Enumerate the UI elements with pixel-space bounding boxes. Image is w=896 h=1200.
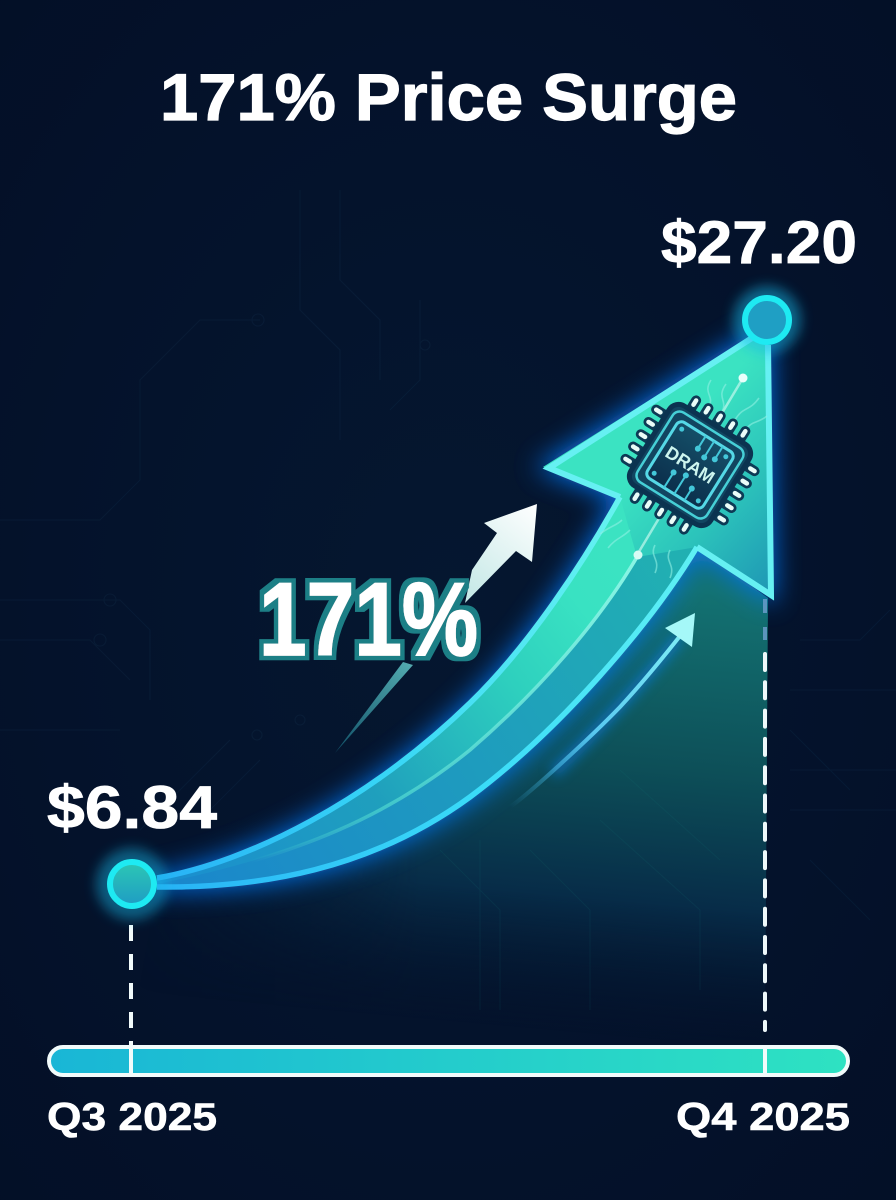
shaded area under the arrow	[276, 551, 768, 980]
arrow glow	[157, 337, 771, 887]
arrow lower outline	[157, 547, 697, 887]
white growth arrow	[335, 504, 537, 753]
centre line	[160, 557, 637, 884]
small cyan arrow	[510, 613, 695, 807]
circuit line with nodes	[637, 378, 743, 555]
node: Q3 start	[96, 848, 168, 920]
icon: DRAM chip	[610, 385, 770, 545]
value label: $27.20: $27.20	[661, 209, 857, 276]
timeline bar	[49, 1046, 848, 1076]
arrow head fill	[543, 337, 771, 598]
node: Q4 end	[733, 286, 801, 354]
arrow head outline	[549, 338, 771, 595]
axis label: Q3 2025: Q3 2025	[47, 1096, 217, 1139]
chip label: DRAM	[662, 442, 718, 488]
main rising arrow	[157, 337, 771, 887]
value label: $6.84: $6.84	[47, 774, 218, 841]
axis label: Q4 2025: Q4 2025	[676, 1096, 850, 1139]
arrow body upper band	[157, 497, 697, 887]
title: 171% Price Surge	[160, 60, 737, 134]
chip body	[625, 400, 755, 530]
171% callout: 171%	[259, 562, 478, 678]
arrow upper outline	[157, 497, 620, 878]
chip traces	[664, 432, 723, 503]
dashed line: Q4	[763, 599, 767, 1030]
chip pins	[610, 385, 770, 545]
arrow body lower band	[157, 520, 697, 887]
dashed line: Q3	[129, 925, 133, 1046]
